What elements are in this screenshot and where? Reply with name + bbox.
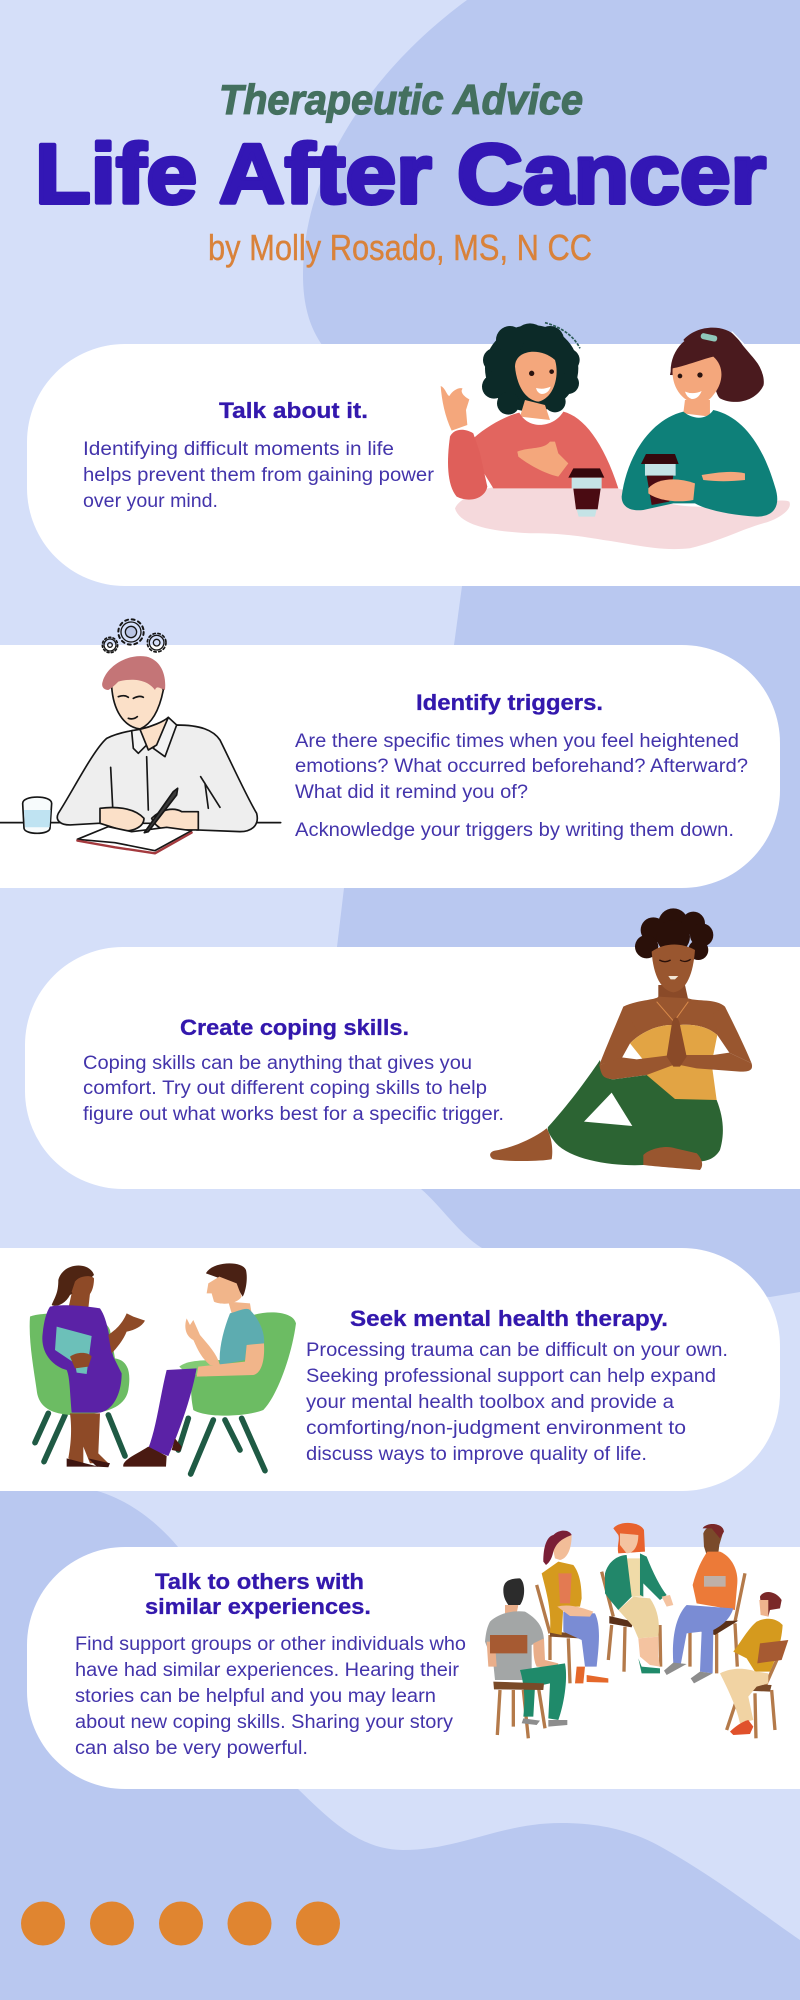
body text: create coping skills: comfort. Try out different coping skills to help	[83, 1078, 487, 1099]
body text: identify triggers: Acknowledge your triggers by writing them down.	[295, 820, 734, 841]
body text: talk to others	[75, 1634, 466, 1759]
illustration: support group sitting in a circle	[485, 1523, 788, 1738]
body text: talk to others: have had similar experiences. Hearing their	[75, 1660, 460, 1681]
byline: by Molly Rosado, MS, N CC	[208, 227, 592, 268]
panel: talk about it	[27, 323, 800, 586]
body text: create coping skills: figure out what works best for a specific trigger.	[83, 1104, 504, 1125]
panel: seek mental health therapy	[0, 1248, 780, 1491]
body text: seek mental health therapy: discuss ways to improve quality of life.	[306, 1444, 647, 1465]
body text: identify triggers: What did it remind you of?	[295, 782, 528, 803]
body text: talk to others: about new coping skills. Sharing your story	[75, 1712, 454, 1733]
illustration: man writing in a notebook with gears above head	[0, 619, 281, 853]
body text: identify triggers	[295, 731, 748, 841]
body text: talk about it: helps prevent them from gaining power	[83, 465, 435, 486]
panel: identify triggers	[0, 619, 780, 888]
body text: create coping skills: Coping skills can be anything that gives you	[83, 1053, 472, 1074]
body text: seek mental health therapy: your mental health toolbox and provide a	[306, 1392, 674, 1413]
subtitle: Therapeutic Advice: Therapeutic Advice	[219, 76, 583, 123]
title block	[35, 76, 766, 268]
body text: identify triggers: emotions? What occurred beforehand? Afterward?	[295, 756, 748, 777]
panel: talk to others	[27, 1523, 800, 1789]
body text: seek mental health therapy	[306, 1340, 728, 1465]
heading: Identify triggers: Identify triggers.	[416, 690, 603, 715]
body text: seek mental health therapy: comforting/non-judgment environment to	[306, 1418, 686, 1439]
body text: seek mental health therapy: Processing trauma can be difficult on your own.	[306, 1340, 728, 1361]
heading: Create coping skills: Create coping skills.	[180, 1015, 409, 1040]
heading: Talk to others with similar experiences: similar experiences.	[145, 1594, 371, 1619]
heading: Talk about it: Talk about it.	[219, 398, 368, 423]
illustration: two women talking over coffee	[441, 323, 790, 549]
illustration: therapist and client in green chairs	[30, 1263, 296, 1474]
body text: seek mental health therapy: Seeking professional support can help expand	[306, 1366, 716, 1387]
body text: talk to others: Find support groups or other individuals who	[75, 1634, 466, 1655]
main title: Life After Cancer: Life After Cancer	[35, 127, 766, 221]
illustration: woman meditating in a seated yoga twist	[490, 908, 752, 1170]
body text: talk about it: Identifying difficult moments in life	[83, 439, 394, 460]
heading: Seek mental health therapy: Seek mental health therapy.	[350, 1306, 668, 1331]
heading: Talk to others with similar experiences: Talk to others with	[155, 1569, 364, 1594]
body text: talk to others: can also be very powerful.	[75, 1738, 308, 1759]
heading: Talk to others with similar experiences	[145, 1569, 371, 1619]
panel: create coping skills	[25, 908, 800, 1189]
body text: create coping skills	[83, 1053, 504, 1125]
decorative row of orange dots	[21, 1902, 340, 1946]
body text: talk about it	[83, 439, 435, 512]
body text: talk about it: over your mind.	[83, 491, 218, 512]
body text: talk to others: stories can be helpful and you may learn	[75, 1686, 436, 1707]
body text: identify triggers: Are there specific times when you feel heightened	[295, 731, 739, 752]
